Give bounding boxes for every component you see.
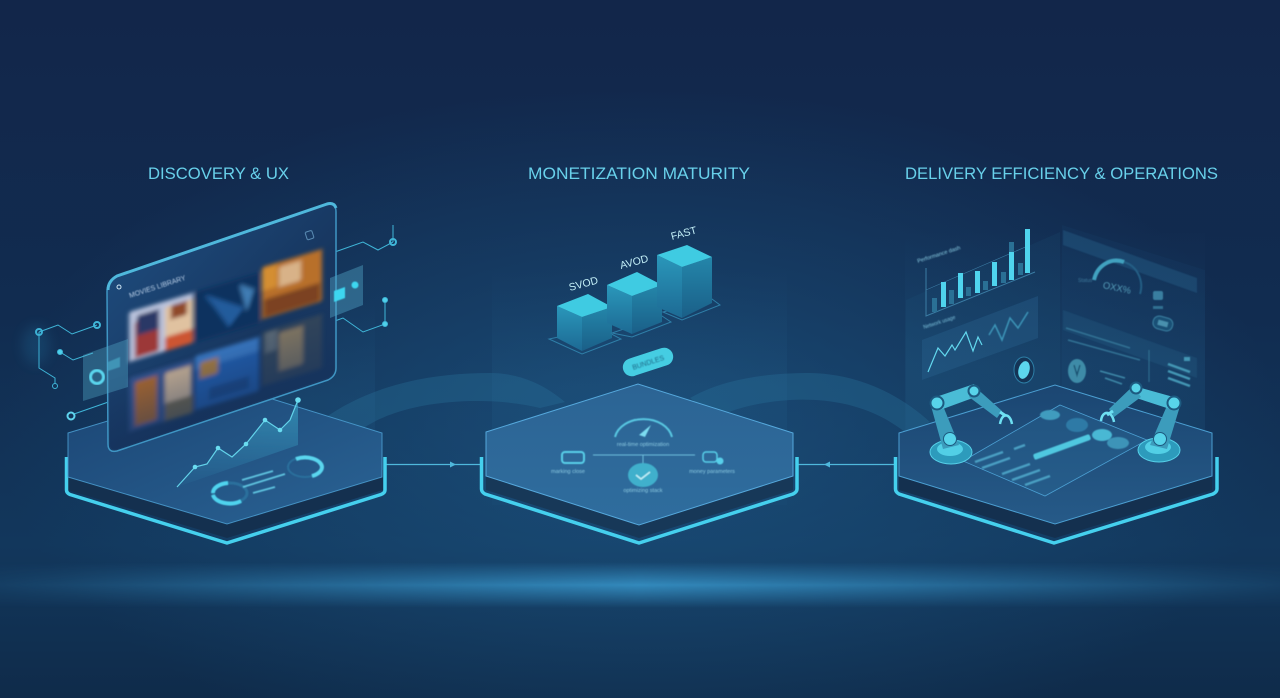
- floating card left: [83, 339, 128, 401]
- back dashboards: [906, 225, 1205, 460]
- tablet lower shade: [110, 305, 334, 449]
- bar: AVOD cube: AVOD: [619, 253, 650, 272]
- heading: Monetization Maturity: MONETIZATION MATURITY: [528, 164, 750, 183]
- heading: Discovery & UX: DISCOVERY & UX: [148, 164, 289, 183]
- bar: FAST cube: [657, 224, 720, 320]
- bar chart: [917, 229, 1035, 316]
- panel: delivery platform: [896, 225, 1217, 543]
- platform diagram: optimizing stack: [623, 488, 663, 494]
- bar: FAST cube: FAST: [670, 224, 699, 243]
- platform top 2: [486, 384, 793, 525]
- robot arm right: [1101, 382, 1180, 462]
- line chart card: Network usage: [923, 315, 957, 331]
- platform diagram: money parameters: [689, 469, 735, 475]
- arrow: delivery to monetization: [797, 462, 895, 468]
- platform diagram: [551, 452, 735, 494]
- platform base 2: [486, 470, 793, 538]
- arrow: discovery to monetization: [385, 462, 481, 468]
- faint light columns: [175, 230, 1205, 505]
- poster grid: [129, 249, 322, 432]
- bar: SVOD cube: SVOD: [568, 274, 600, 294]
- bar chart: Performance dash: [917, 245, 961, 265]
- right dashboard: [1063, 230, 1197, 386]
- circuit lines: [36, 225, 396, 420]
- pill label: [620, 345, 676, 379]
- pill label: BUNDLES: [632, 355, 666, 372]
- platform top 3: [899, 385, 1212, 524]
- platform base 1: [68, 470, 383, 538]
- right dashboard: Status: [1078, 278, 1093, 284]
- bar: SVOD cube: [549, 274, 621, 354]
- platform top 1: [68, 385, 382, 524]
- floating card right: [330, 265, 363, 318]
- bar: AVOD cube: [607, 253, 671, 337]
- robot arm left: [930, 384, 1012, 464]
- connecting arcs between platforms: [322, 373, 930, 432]
- platform gauge: real-time optimization: [617, 442, 669, 448]
- donut gauges and legend: [213, 457, 322, 503]
- platform base 3: [899, 470, 1212, 538]
- platform diagram: marking close: [551, 469, 585, 475]
- tablet title text: MOVIES LIBRARY: [128, 275, 187, 300]
- platform gauge: [615, 419, 672, 448]
- platform console: [963, 405, 1147, 496]
- area chart: [177, 397, 301, 487]
- right dashboard: OXX%: [1102, 280, 1133, 297]
- tablet screen: [107, 204, 336, 451]
- panel: monetization platform: [482, 224, 797, 543]
- heading: Delivery Efficiency & Operations: DELIVERY EFFICIENCY & OPERATIONS: [905, 164, 1218, 183]
- line chart card: [922, 296, 1038, 380]
- tablet icon: [305, 230, 314, 240]
- panel: discovery platform: [22, 204, 396, 543]
- round icon: [1014, 357, 1034, 383]
